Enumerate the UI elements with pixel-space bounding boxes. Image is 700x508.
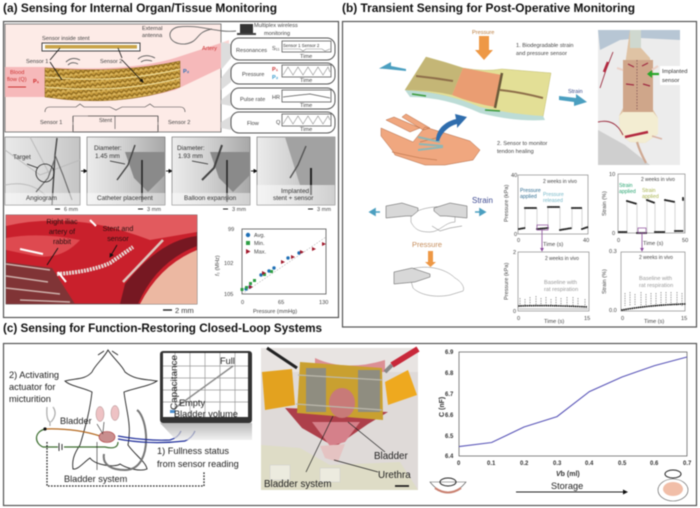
- sensor caption: [516, 43, 574, 57]
- chart: pressure baseline: Pressure (kPa): [504, 263, 510, 300]
- chart: strain baseline: Time (s): [644, 319, 664, 325]
- panel: transient sensing: [342, 22, 696, 327]
- chart: pressure over 40 s: released: [543, 198, 563, 204]
- curved blue arrow: [436, 114, 467, 141]
- chart: strain over 50 s: 0: [612, 231, 615, 237]
- readout: pressure: [231, 63, 335, 84]
- chart: pressure over 40 s: Pressure (kPa): [504, 185, 510, 222]
- readout: flow: Time: [300, 127, 312, 133]
- circuit: Stent: [99, 118, 113, 124]
- chart: strain over 50 s: 2 weeks in vivo: [641, 177, 675, 183]
- gold tapes and frame: [262, 362, 417, 420]
- chart: pressure baseline: 15: [584, 316, 590, 322]
- chart: pressure baseline: 2 weeks in vivo: [545, 256, 579, 262]
- photo: implanted stent and sensor: [257, 137, 335, 205]
- fullness status label: [157, 446, 239, 469]
- chart: pressure baseline: 0: [517, 316, 520, 322]
- photo: balloon expansion: [172, 137, 250, 205]
- heading: panel c: (c) Sensing for Function-Restoring Closed-Loop Systems: [3, 321, 322, 335]
- line chart: capacitance vs bladder volume: 6.9: [445, 350, 454, 356]
- multiplex label: Multiplex wireless: [254, 23, 298, 29]
- multiplex label: [254, 23, 298, 37]
- photo: balloon expansion: 1.93 mm: [178, 153, 203, 160]
- readout: resonances: [231, 38, 335, 60]
- circuit: Sensor 2: [168, 120, 190, 126]
- rat strain illustration: Strain: [472, 196, 493, 205]
- readout: pulse rate: Time: [300, 103, 312, 109]
- heading: panel b: (b) Transient Sensing for Post-Operative Monitoring: [342, 1, 635, 15]
- chart: strain baseline: Strain (%): [602, 269, 608, 294]
- strain label: Strain: [568, 89, 583, 95]
- stent diagram: [5, 24, 229, 132]
- scatter chart: resonance vs pressure: 65: [278, 300, 284, 306]
- chart: strain over 50 s: applied: [642, 194, 659, 200]
- sensor labels and arrows: [26, 48, 143, 82]
- scatter chart: resonance vs pressure: 99: [228, 227, 234, 233]
- caption: tendon healing: tendon healing: [497, 149, 534, 155]
- chart: pressure baseline: Time (s): [544, 319, 564, 325]
- monitor: capacitance vs bladder volume: Empty: [179, 398, 205, 408]
- readout: pulse rate: [231, 88, 335, 109]
- readout: resonances: S₁₁: [272, 46, 280, 52]
- chart: strain baseline: rat respiration: [639, 283, 673, 289]
- chart: pressure baseline: rat respiration: [544, 287, 578, 293]
- stent mesh: [45, 61, 180, 101]
- chart: strain over 50 s: applied: [619, 189, 636, 195]
- fullness status label: from sensor reading: [157, 459, 239, 469]
- icon: actuator clip: [47, 407, 55, 426]
- sensor illustration: [405, 57, 551, 120]
- chart: pressure over 40 s: Pressure: [520, 188, 541, 194]
- dotted feedback line: [47, 442, 204, 486]
- chart: strain over 50 s: Strain: [619, 183, 633, 189]
- line chart: capacitance vs bladder volume: 0.1: [487, 461, 496, 467]
- readout: flow: Q: [276, 120, 281, 126]
- chart: pressure over 40 s: applied: [520, 194, 537, 200]
- chart: pressure over 40 s: 40: [511, 173, 517, 179]
- line chart: capacitance vs bladder volume: 0.3: [553, 461, 562, 467]
- actuator label: [9, 370, 59, 404]
- chart: strain baseline: 0: [621, 316, 624, 322]
- arrow: [166, 170, 172, 172]
- chart: strain baseline: 2 weeks in vivo: [639, 255, 673, 261]
- line chart: capacitance vs bladder volume: 6.8: [445, 371, 454, 377]
- fullness status label: 1) Fullness status: [157, 446, 229, 456]
- photo: implanted bladder system: [261, 348, 418, 490]
- blood flow label: Blood: [10, 70, 24, 76]
- blood flow label: P₁: [33, 79, 40, 85]
- line chart: capacitance vs bladder volume: 0.7: [683, 461, 692, 467]
- data points: [240, 242, 326, 291]
- chart: pressure baseline: Baseline with: [544, 280, 577, 286]
- readout: flow: Flow: [247, 121, 260, 127]
- chart: pressure baseline: [504, 250, 590, 325]
- scale bars: 3 mm: [147, 207, 161, 213]
- rat pressure illustration: [394, 240, 464, 296]
- line chart: capacitance vs bladder volume: 6.7: [445, 392, 454, 398]
- photo: implanted bladder system: Bladder system: [264, 479, 332, 490]
- photo: catheter placement: 1.45 mm: [95, 153, 120, 160]
- blood flow label: P₂: [183, 69, 190, 75]
- rat pressure illustration: Pressure: [412, 240, 442, 249]
- pressure arrow: Pressure: [472, 30, 494, 36]
- scatter chart: resonance vs pressure: [215, 227, 328, 315]
- bladder with wiring: [36, 422, 195, 470]
- external antenna: [142, 26, 236, 44]
- chart: pressure over 40 s: Pressure: [543, 192, 564, 198]
- legend: Max.: [254, 250, 267, 256]
- legend: Avg.: [254, 233, 266, 239]
- scatter chart: resonance vs pressure: 130: [319, 300, 328, 306]
- readout: flow: [231, 112, 335, 133]
- kidneys: [96, 406, 119, 422]
- chart: pressure over 40 s: 0: [514, 232, 517, 238]
- readout: resonances: Resonances: [236, 48, 267, 54]
- photo: rat with implanted sensor: Implanted: [662, 69, 687, 75]
- scatter chart: resonance vs pressure: 105: [224, 292, 233, 298]
- blood flow label: Artery: [202, 46, 217, 52]
- readout: resonances: Sensor 1 Sensor 2: [283, 43, 320, 48]
- panel: closed-loop systems: [4, 344, 696, 506]
- scale bar: 2 mm: [163, 306, 194, 315]
- photo: implanted stent and sensor: Implanted: [281, 188, 310, 195]
- blood flow label: flow (Q): [7, 77, 27, 83]
- scale bars: 6 mm: [64, 207, 78, 213]
- chart: pressure over 40 s: 40: [583, 238, 589, 244]
- strain arrows: [379, 62, 587, 106]
- chart: pressure baseline: 0: [513, 309, 516, 315]
- rat tail: [104, 410, 146, 470]
- scale bars: 3 mm: [317, 207, 331, 213]
- arrow: [81, 170, 87, 172]
- chart: strain over 50 s: 0: [617, 238, 620, 244]
- chart: pressure over 40 s: 0: [517, 238, 520, 244]
- hand illustration: [381, 114, 480, 165]
- chart: pressure baseline: 2: [513, 250, 516, 256]
- photo: stent in rabbit artery: [6, 215, 197, 304]
- chart: strain baseline: Baseline with: [639, 276, 672, 282]
- monitor: capacitance vs bladder volume: Full: [220, 356, 235, 366]
- blood flow label: [7, 46, 217, 87]
- photo: catheter placement: Catheter placement: [97, 195, 153, 202]
- scale bar: 2 mm: 2 mm: [175, 306, 194, 315]
- chart: strain baseline: 15: [681, 316, 687, 322]
- photo: implanted bladder system: Urethra: [378, 470, 411, 481]
- chart: strain baseline: 0.3: [609, 249, 617, 255]
- chart: strain baseline: [602, 249, 687, 325]
- photo: stent in rabbit artery: Stent and: [103, 224, 133, 233]
- pressure arrow: [472, 30, 494, 60]
- caption: tendon healing: 2. Sensor to monitor: [497, 141, 548, 147]
- line chart: capacitance vs bladder volume: Vb (ml): [556, 471, 580, 478]
- photo: balloon expansion: Balloon expansion: [184, 195, 237, 202]
- readout: pulse rate: HR: [272, 95, 280, 101]
- line chart: capacitance vs bladder volume: [439, 350, 692, 478]
- caption: tendon healing: [497, 141, 548, 155]
- icon: full bladder: [658, 470, 688, 501]
- line chart: capacitance vs bladder volume: 6.5: [445, 434, 454, 440]
- photo: balloon expansion: Diameter:: [177, 145, 205, 152]
- monitor: capacitance vs bladder volume: Capacitance: [169, 355, 179, 410]
- photo: rat with implanted sensor: sensor: [662, 78, 679, 84]
- external antenna: antenna: [142, 33, 163, 39]
- photo: stent in rabbit artery: rabbit: [53, 237, 71, 246]
- line chart: capacitance vs bladder volume: 0.5: [618, 461, 627, 467]
- readout: pulse rate: Pulse rate: [240, 97, 265, 103]
- readout: pressure: Time: [300, 78, 312, 84]
- legend: Min.: [254, 241, 265, 247]
- photo: stent in rabbit artery: sensor: [107, 234, 129, 243]
- sensor labels and arrows: Sensor 1: [26, 59, 48, 65]
- scatter chart: resonance vs pressure: f₀ (MHz): [215, 255, 221, 276]
- photo: implanted stent and sensor: stent + sensor: [273, 195, 314, 202]
- chart: strain over 50 s: Strain: [642, 188, 656, 194]
- chart: pressure over 40 s: [504, 173, 589, 251]
- scatter chart: resonance vs pressure: 0: [241, 300, 244, 306]
- rat outline: [65, 350, 157, 470]
- wireless signal icons: [66, 56, 155, 65]
- readout: pressure: Pressure: [242, 72, 264, 78]
- bladder label: Bladder: [60, 416, 92, 426]
- scale bars: [55, 207, 331, 213]
- heading: panel a: (a) Sensing for Internal Organ/Tissue Monitoring: [3, 1, 277, 15]
- sensor caption: 1. Biodegradable strain: [516, 43, 574, 49]
- icon: empty bladder: [430, 478, 466, 493]
- line chart: capacitance vs bladder volume: 6.4: [445, 454, 454, 460]
- scatter chart: resonance vs pressure: 102: [224, 261, 233, 267]
- circuit: Sensor 1: [40, 120, 62, 126]
- readout wedges: [221, 42, 231, 130]
- photo: angiogram: [5, 137, 80, 205]
- monitor: capacitance vs bladder volume: [160, 351, 252, 440]
- chart: strain over 50 s: Time (s): [643, 241, 663, 247]
- scale bars: 3 mm: [232, 207, 246, 213]
- actuator label: micturition: [9, 394, 51, 404]
- readout: pressure: P₂: [272, 75, 279, 81]
- icon: laptop: [237, 24, 256, 35]
- sensor caption: and pressure sensor: [516, 51, 567, 57]
- storage arrow: Storage: [551, 481, 583, 491]
- readout: pressure: P₁: [272, 67, 279, 73]
- actuator label: actuator for: [9, 382, 55, 392]
- line chart: capacitance vs bladder volume: C (nF): [439, 397, 446, 417]
- external antenna: External: [142, 26, 163, 32]
- sensor inside stent inset: [42, 36, 140, 51]
- chart: strain over 50 s: 10: [609, 172, 615, 178]
- photo: implanted bladder system: Bladder: [374, 451, 409, 462]
- actuator label: 2) Activating: [9, 370, 59, 380]
- sensor inside stent inset: Sensor inside stent: [42, 36, 90, 42]
- multiplex label: monitoring: [264, 31, 290, 37]
- storage arrow: [516, 481, 627, 492]
- readout: resonances: Time: [300, 54, 312, 60]
- line chart: capacitance vs bladder volume: 6.6: [445, 413, 454, 419]
- circuit: [40, 104, 190, 132]
- chart: pressure over 40 s: 2 weeks in vivo: [543, 179, 577, 185]
- arrow: [251, 170, 257, 172]
- line chart: capacitance vs bladder volume: 0.2: [520, 461, 529, 467]
- line chart: capacitance vs bladder volume: 0: [457, 461, 461, 467]
- monitor: capacitance vs bladder volume: Bladder volume: [174, 409, 238, 419]
- rat strain illustration: [370, 196, 493, 232]
- photo: catheter placement: Diameter:: [94, 145, 122, 152]
- photo: stent in rabbit artery: Right iliac: [46, 217, 78, 226]
- chart: strain over 50 s: 50: [682, 238, 688, 244]
- sensor labels and arrows: Sensor 2: [100, 59, 122, 65]
- photo: rat with implanted sensor: [598, 30, 687, 165]
- photo: stent in rabbit artery: artery of: [49, 227, 75, 236]
- chart: strain over 50 s: Strain (%): [602, 191, 608, 216]
- line chart: capacitance vs bladder volume: 0.6: [650, 461, 659, 467]
- legend: [246, 233, 267, 256]
- bladder system label: Bladder system: [64, 474, 128, 484]
- line chart: capacitance vs bladder volume: 0.4: [585, 461, 594, 467]
- chart: pressure over 40 s: Time (s): [543, 242, 563, 248]
- chart: strain over 50 s: [602, 172, 688, 251]
- scatter chart: resonance vs pressure: Pressure (mmHg): [253, 309, 297, 315]
- chart: strain baseline: 0.0: [609, 308, 617, 314]
- photo: angiogram: Target: [13, 154, 31, 161]
- photo: catheter placement: [87, 137, 165, 205]
- photo: angiogram: Angiogram: [26, 195, 57, 202]
